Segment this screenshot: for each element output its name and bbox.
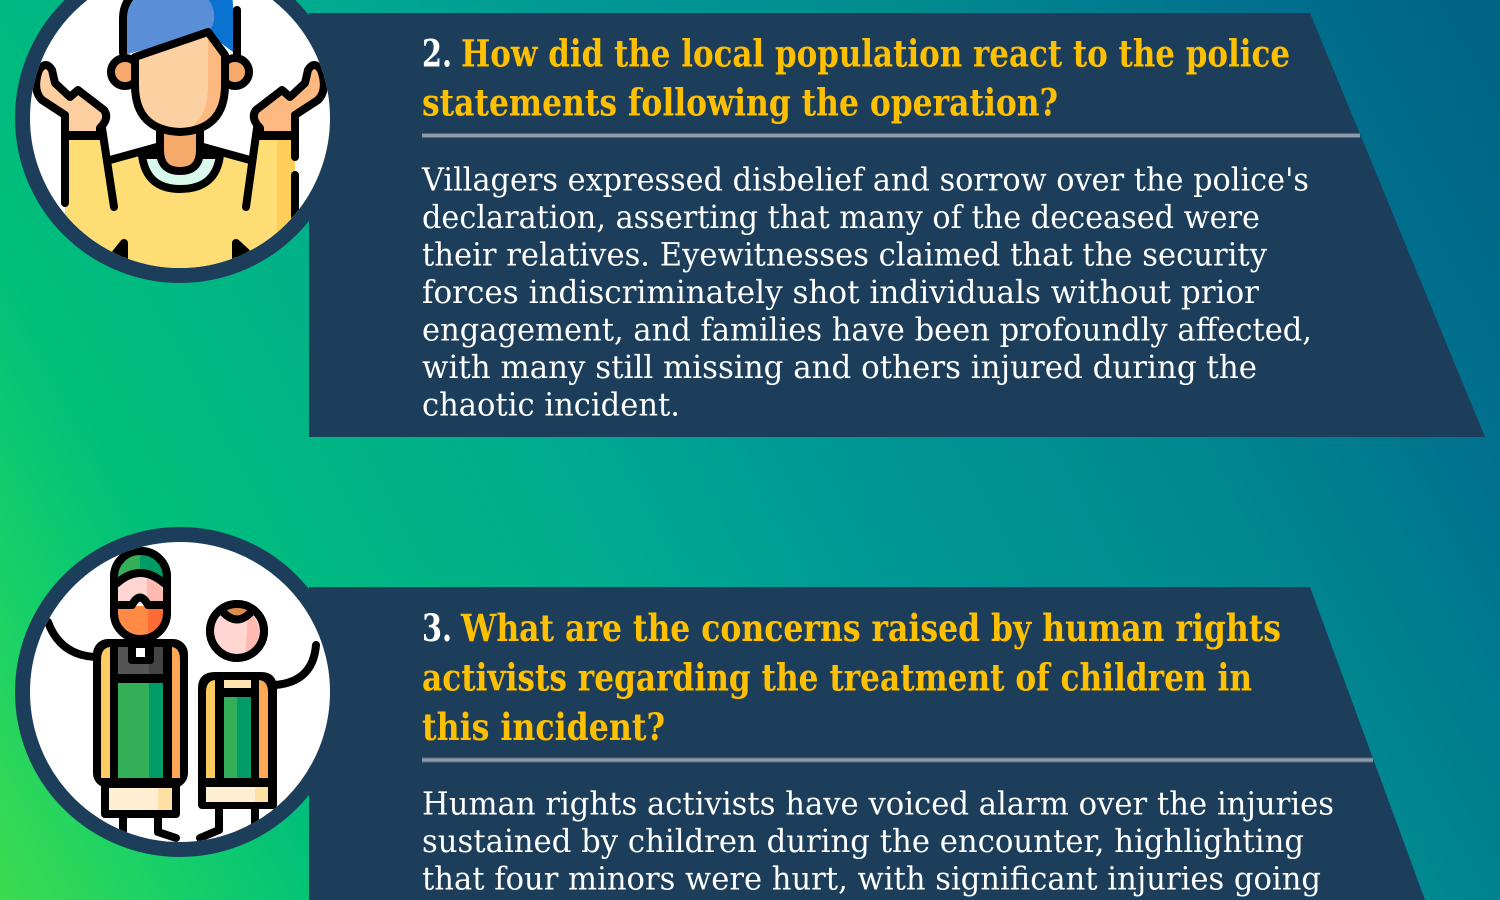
adult legs [123,815,176,842]
panel shape 3 [309,587,1425,900]
body text: question 2: declaration, asserting that many of the deceased were [422,198,1260,236]
panel: question 2 [309,13,1485,437]
face [139,36,208,128]
body text: question 3 [422,784,1334,898]
body text: question 2: with many still missing and others injured during the [422,348,1257,386]
heading: question 2: 2. [422,32,452,76]
panel: question 3 [309,587,1425,900]
heading: question 3: 3. [422,606,452,650]
body text: question 2: their relatives. Eyewitnesses claimed that the security [422,236,1267,274]
heading: question 3: What are the concerns raised by human rights [460,606,1281,650]
adult head [114,551,167,639]
heading: question 3 [422,606,1281,749]
arms [48,622,316,685]
hair [124,0,237,55]
body text: question 2 [421,160,1312,424]
heading: question 3: activists regarding the treatment of children in [422,656,1252,700]
body text: question 3: that four minors were hurt, with significant injuries going [422,860,1321,898]
body text: question 2: Villagers expressed disbelief and sorrow over the police's [421,160,1309,198]
heading: question 2: statements following the operation? [422,80,1058,124]
shirt [65,140,295,268]
child legs [200,805,255,838]
child head [210,604,264,658]
collar [142,155,220,189]
child robe [202,676,273,805]
neck [160,128,200,171]
body text: question 2: chaotic incident. [422,386,680,424]
body text: question 2: forces indiscriminately shot individuals without prior [422,273,1260,311]
heading: question 2 [422,32,1290,124]
body text: question 3: sustained by children during the encounter, highlighting [422,822,1304,860]
panel shape 2 [309,13,1485,437]
body text: question 3: Human rights activists have voiced alarm over the injuries [422,784,1334,822]
heading: question 2: How did the local population react to the police [461,32,1290,76]
adult robe [97,643,184,784]
hands [36,65,106,135]
body text: question 2: engagement, and families have been profoundly affected, [422,310,1312,348]
adult skirt [105,784,176,814]
icon: adult and child in traditional dress [22,534,338,850]
ears [111,58,139,86]
heading: question 3: this incident? [422,705,665,749]
icon: person shrugging with raised hands [22,0,338,290]
